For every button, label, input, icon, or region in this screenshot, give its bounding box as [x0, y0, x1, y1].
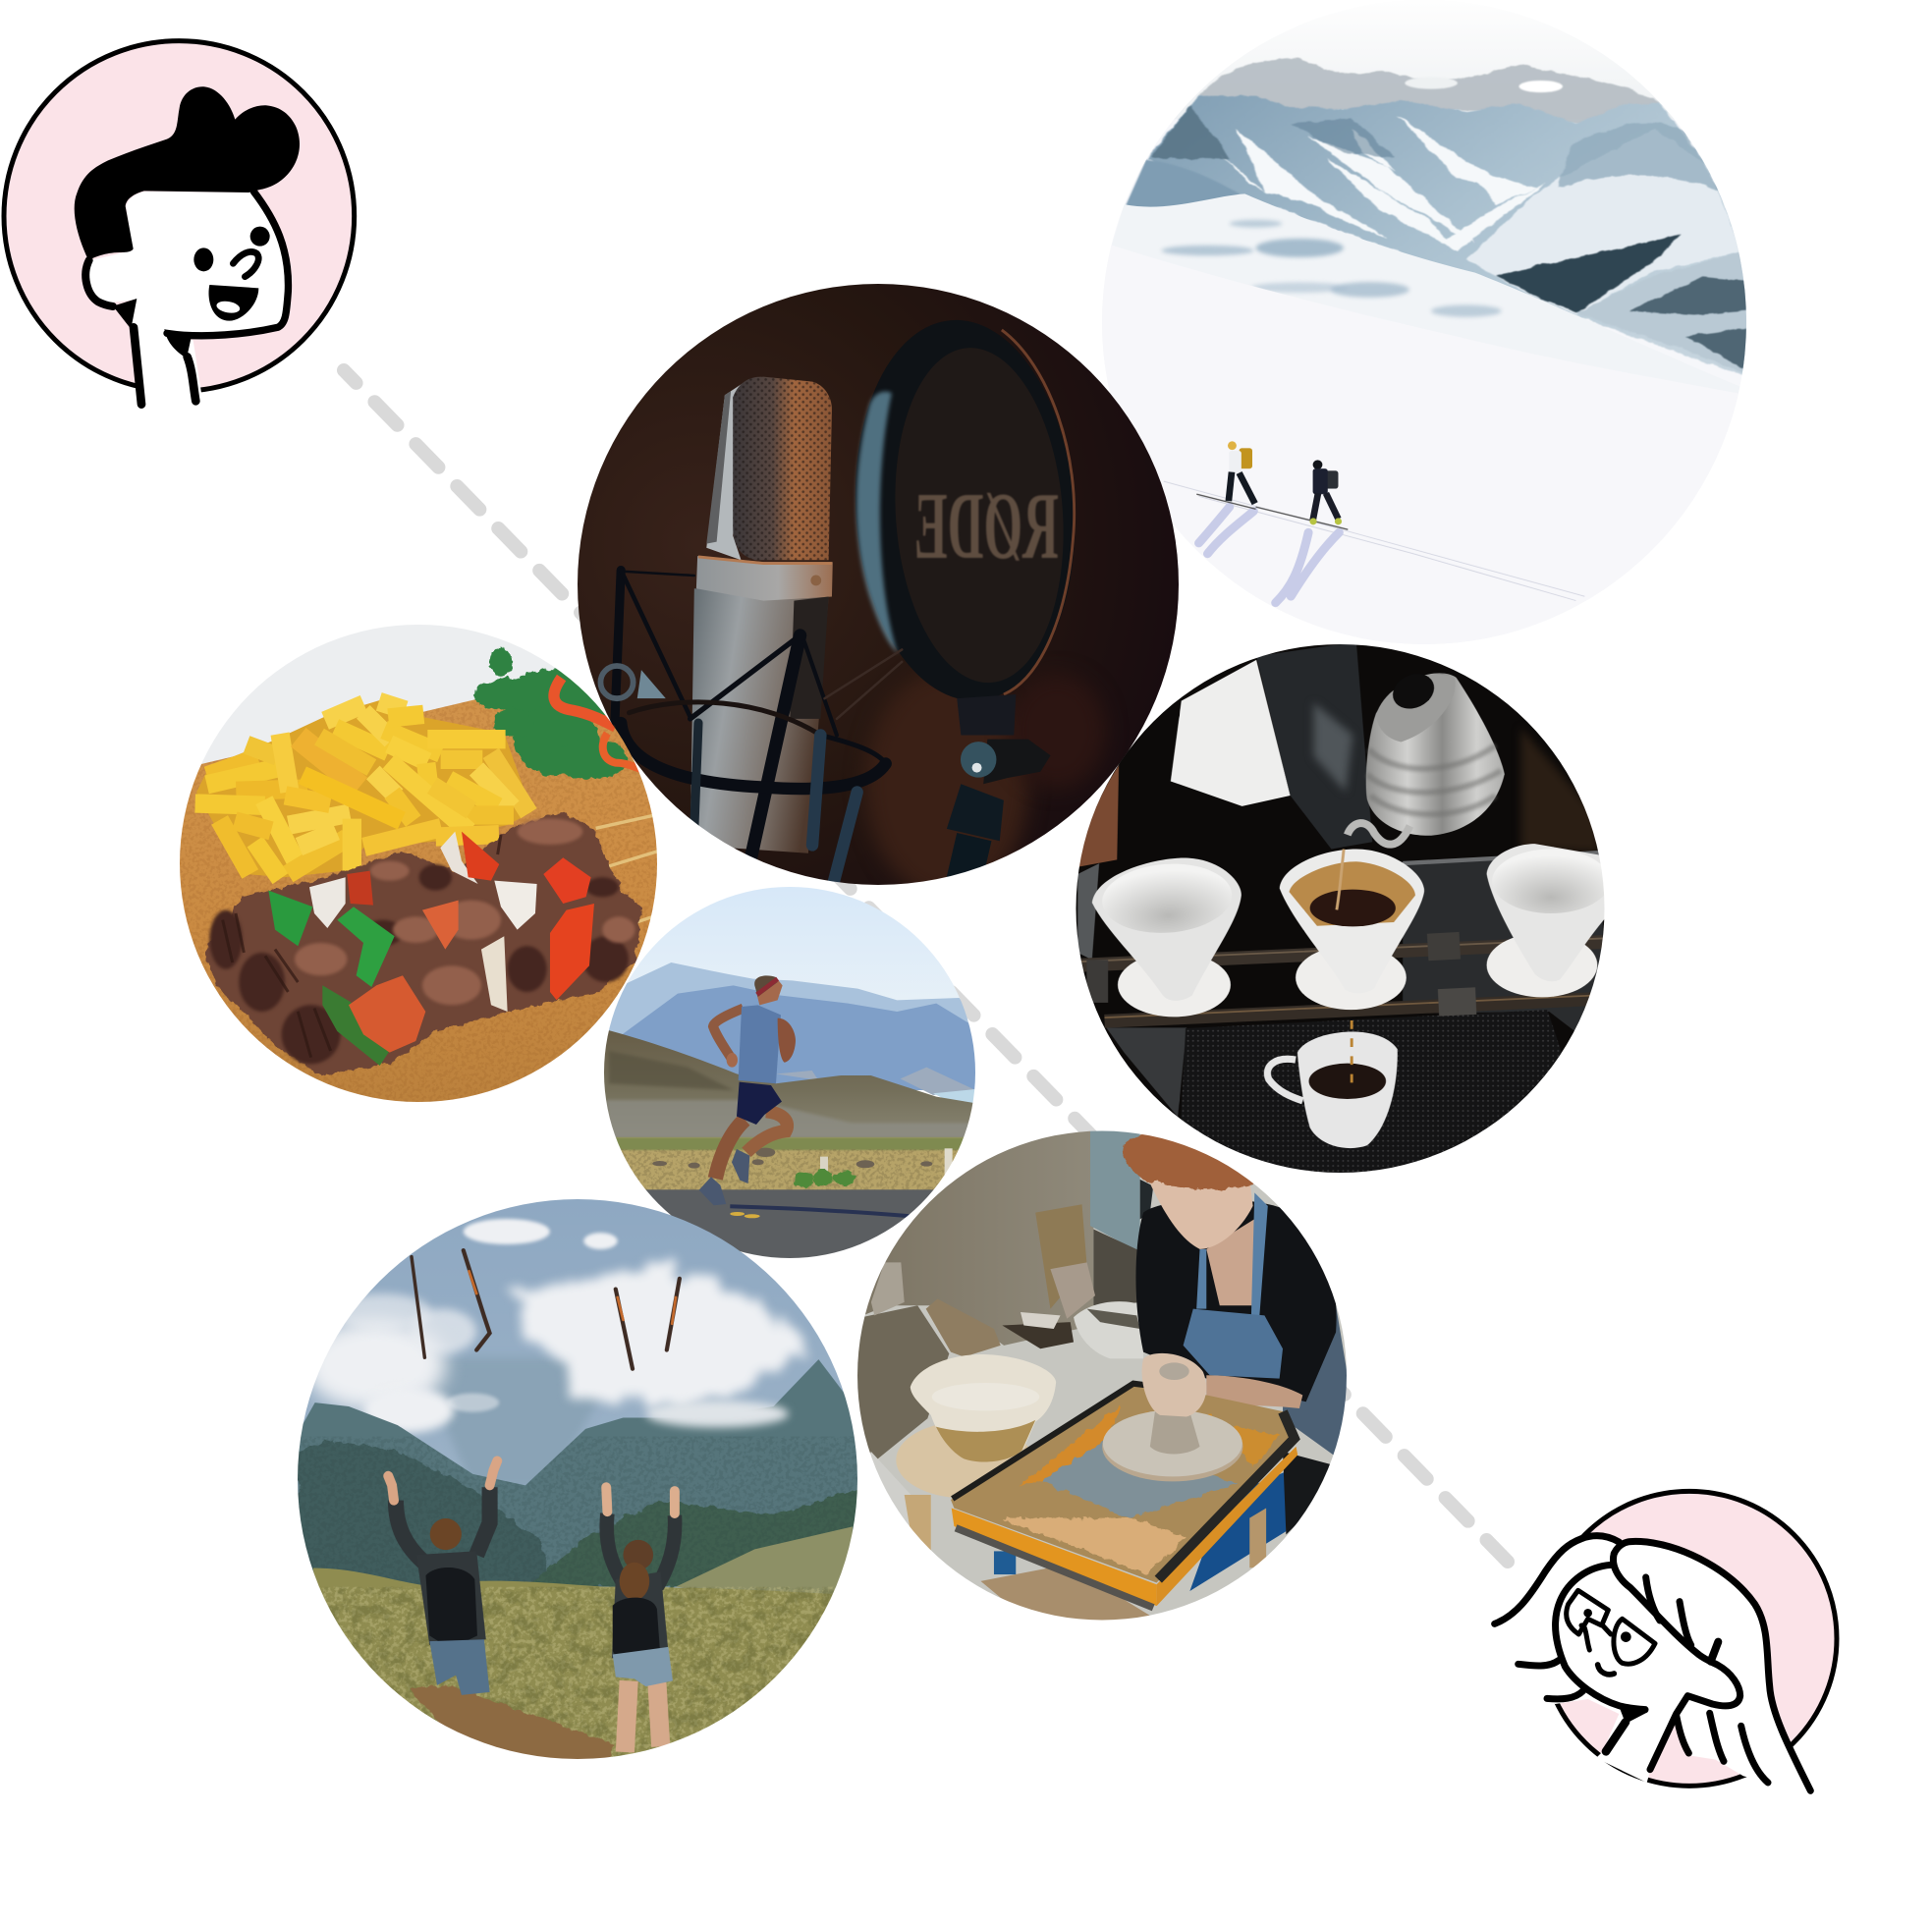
photo circle: woman throwing pottery on a wheel	[857, 1131, 1347, 1621]
meat	[204, 812, 641, 1075]
kettle	[1348, 667, 1505, 845]
eyes, nose and mouth	[193, 227, 270, 321]
studio clutter	[855, 1204, 1143, 1461]
pipe rails	[1081, 938, 1603, 1021]
pink circle backdrop	[4, 41, 355, 391]
avatar: girl with glasses and long hair	[1493, 1491, 1837, 1792]
coffee cup	[1267, 1020, 1398, 1148]
coffee drippers	[1092, 844, 1610, 1017]
sticks	[596, 815, 658, 925]
glasses and facial features	[1567, 1590, 1655, 1675]
table and mat	[1077, 852, 1606, 1182]
side table and bowl	[896, 1354, 1056, 1551]
herbs	[474, 646, 629, 779]
fries	[196, 697, 532, 877]
vegetables	[268, 832, 594, 1066]
wheel tray	[951, 1353, 1297, 1608]
trekking poles	[412, 1250, 680, 1369]
barista	[1077, 642, 1372, 867]
neck cut-out	[131, 297, 201, 412]
photo circle: runner on a desert road	[604, 887, 975, 1258]
pop filter: RØDE	[914, 473, 1059, 579]
face outline	[85, 192, 288, 405]
hair and face lines	[1495, 1536, 1810, 1790]
face	[85, 192, 288, 334]
hiker left	[388, 1460, 497, 1695]
stand	[947, 694, 1051, 877]
hair	[75, 86, 300, 260]
pink circle backdrop	[1542, 1491, 1837, 1786]
white hair and face fill	[1493, 1539, 1810, 1792]
photo circle: pour-over coffee being brewed	[1076, 644, 1605, 1173]
photo circle: ski touring in snowy mountains	[1102, 53, 1746, 644]
dashed connector line between the two avatars	[344, 370, 1508, 1562]
runner	[699, 975, 796, 1205]
avatar: smiling boy with quiff	[4, 41, 355, 412]
photo circle: studio microphone with pop filter	[578, 284, 1179, 885]
photo circle: beef skewers with fries on a wooden board	[180, 625, 657, 1102]
shock mount	[615, 571, 902, 886]
skiers	[1196, 441, 1348, 603]
photo circle: hikers tossing trekking poles	[298, 1199, 857, 1759]
hiker right	[606, 1487, 675, 1752]
potter	[1124, 1133, 1350, 1534]
pop filter	[854, 320, 1076, 698]
